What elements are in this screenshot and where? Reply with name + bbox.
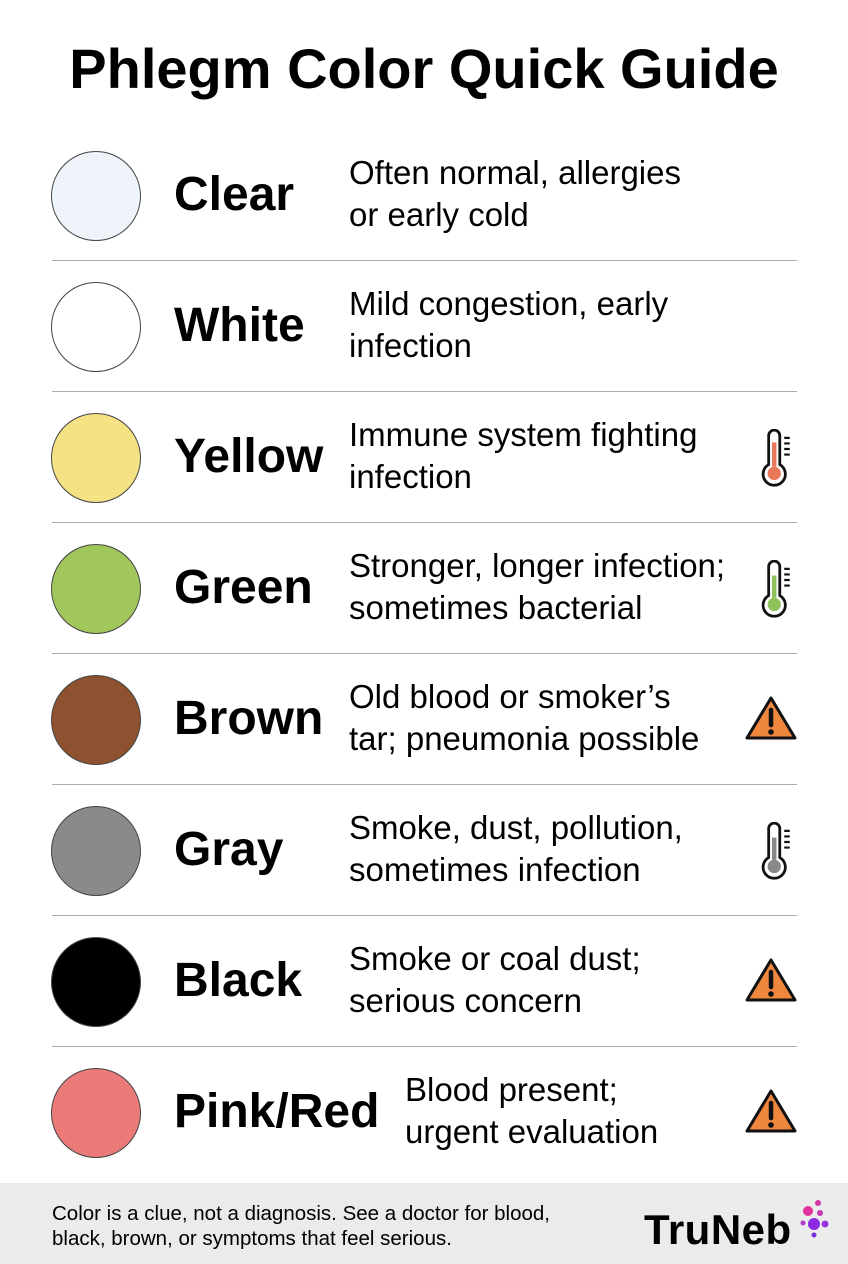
row: gray: sometimes infection: [349, 851, 641, 888]
row: clear: or early cold: [349, 196, 529, 233]
row: gray: Smoke, dust, pollution,: [349, 809, 683, 846]
icon: thermometer red: [762, 429, 790, 487]
row: yellow: infection: [349, 458, 472, 495]
row: clear: Clear: [174, 168, 294, 221]
title: Phlegm Color Quick Guide: [69, 37, 779, 100]
row: black: serious concern: [349, 982, 582, 1019]
row: yellow: Yellow: [174, 430, 323, 483]
row: pink/red: Blood present;: [405, 1071, 618, 1108]
row: brown: tar; pneumonia possible: [349, 720, 699, 757]
row: white: infection: [349, 327, 472, 364]
row: green: [51, 544, 790, 634]
footer note: black, brown, or symptoms that feel serious.: [52, 1227, 452, 1250]
row: clear: [51, 151, 681, 241]
row: clear: Often normal, allergies: [349, 154, 681, 191]
footer note: Color is a clue, not a diagnosis. See a doctor for blood,: [52, 1202, 550, 1225]
footer note: [52, 1202, 550, 1250]
icon: thermometer green: [762, 560, 790, 618]
row: pink/red: urgent evaluation: [405, 1113, 658, 1150]
row: white: Mild congestion, early: [349, 285, 668, 322]
row: gray: Gray: [174, 823, 283, 876]
row: yellow: Immune system fighting: [349, 416, 697, 453]
row: white: White: [174, 299, 305, 352]
row: green: sometimes bacterial: [349, 589, 642, 626]
row: black: Smoke or coal dust;: [349, 940, 641, 977]
row: gray: [51, 806, 790, 896]
row: brown: Old blood or smoker’s: [349, 678, 671, 715]
icon: warning: [746, 696, 797, 740]
icon: thermometer gray: [762, 822, 790, 880]
row: brown: [51, 675, 797, 765]
row: black: [51, 937, 797, 1027]
row: white: [51, 282, 668, 372]
row: pink/red: Pink/Red: [174, 1085, 379, 1138]
logo: TruNeb: [644, 1206, 792, 1253]
row: brown: Brown: [174, 692, 323, 745]
row: green: Green: [174, 561, 313, 614]
row: pink/red: [51, 1068, 797, 1158]
row: black: Black: [174, 954, 302, 1007]
row: yellow: [51, 413, 790, 503]
icon: warning: [746, 958, 797, 1002]
icon: warning: [746, 1089, 797, 1132]
footer: [0, 1183, 848, 1264]
row: green: Stronger, longer infection;: [349, 547, 725, 584]
